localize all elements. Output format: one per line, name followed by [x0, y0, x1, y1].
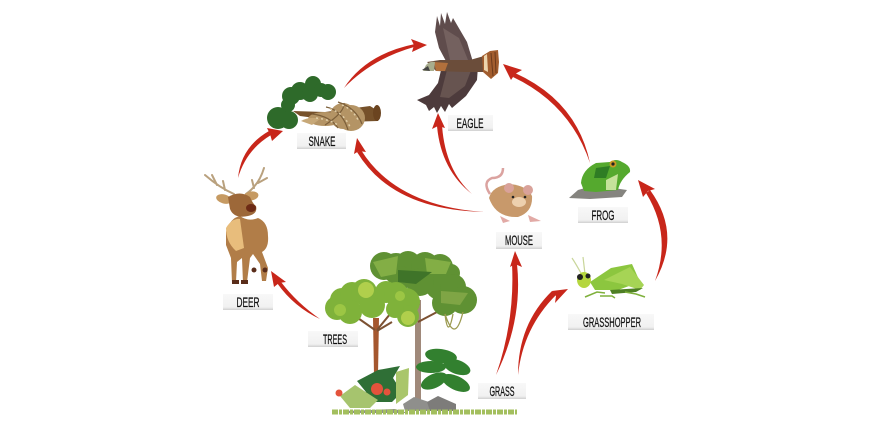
arrow: grasshopper to frog — [638, 180, 667, 281]
arrow: grass to grasshopper — [518, 289, 568, 375]
icon: mouse — [486, 168, 541, 223]
label: deer: DEER — [236, 294, 260, 310]
label: snake: SNAKE — [308, 133, 336, 149]
icon: frog — [569, 160, 630, 199]
arrow: frog to eagle — [503, 64, 590, 163]
icon: snake on branch — [267, 76, 381, 131]
label: grass — [478, 383, 526, 399]
plant: large leaves — [416, 347, 473, 396]
arrow: snake to eagle — [344, 39, 427, 88]
arrow: mouse to snake — [354, 138, 484, 212]
arrow: mouse to eagle — [432, 113, 472, 194]
label: mouse — [496, 232, 542, 249]
label: trees — [308, 331, 358, 347]
label: deer — [223, 294, 273, 310]
label: grasshopper: GRASSHOPPER — [583, 314, 641, 330]
label: eagle: EAGLE — [456, 115, 484, 131]
label: grasshopper — [568, 314, 654, 330]
label: trees: TREES — [323, 331, 347, 347]
label: grass: GRASS — [490, 383, 514, 399]
illustration: trees and plants — [325, 251, 517, 413]
ground grass — [332, 410, 517, 414]
label: mouse: MOUSE — [505, 232, 533, 248]
label: snake — [297, 133, 346, 149]
rocks — [345, 396, 456, 413]
arrow: deer to snake — [238, 128, 283, 178]
label: eagle — [448, 115, 493, 131]
icon: deer — [205, 168, 268, 284]
label: frog: FROG — [592, 207, 614, 223]
label: frog — [578, 207, 628, 223]
icon: grasshopper — [572, 257, 645, 298]
icon: eagle — [417, 12, 499, 113]
plant: fern and flowers — [336, 366, 409, 408]
arrow: grass to mouse — [496, 251, 522, 375]
arrow: trees to deer — [271, 271, 320, 319]
